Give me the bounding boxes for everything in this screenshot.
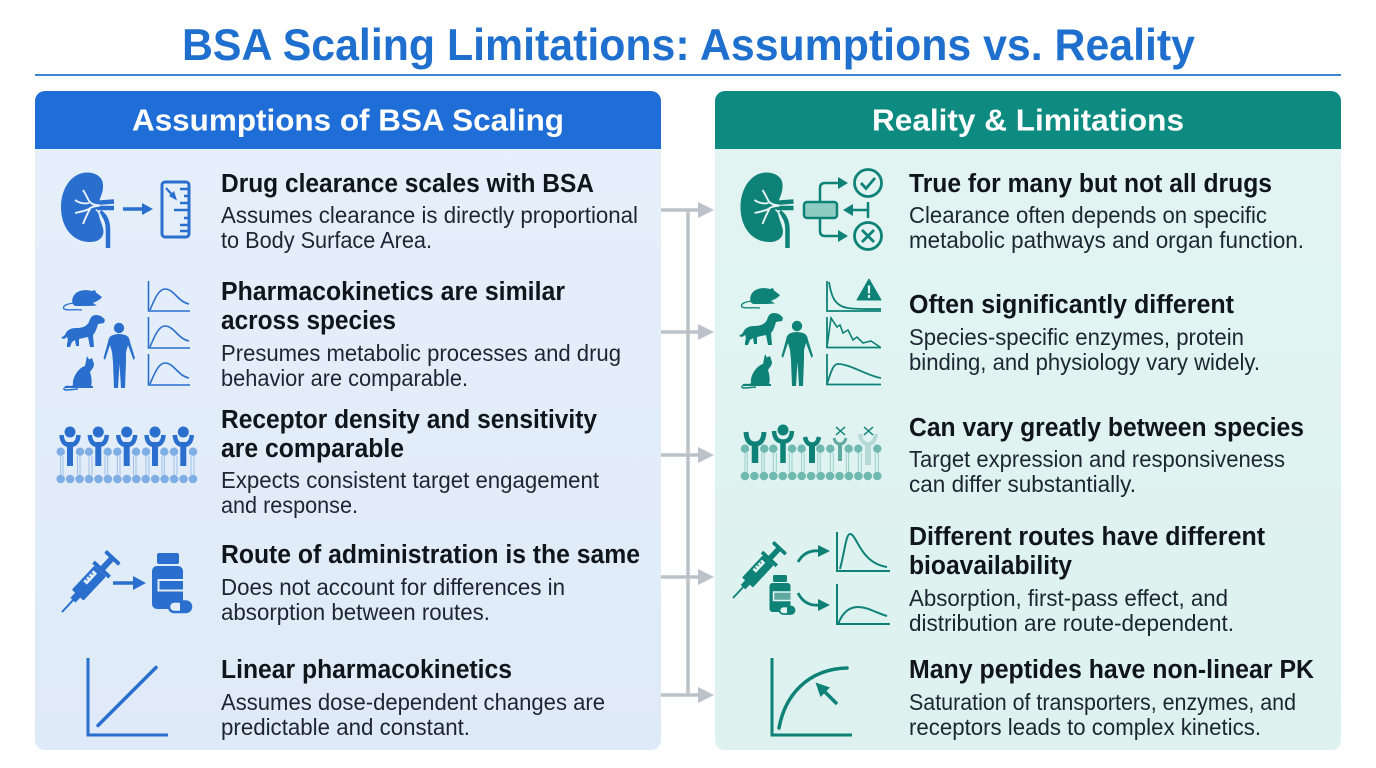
icon: species with divergent curves and warning: [739, 279, 881, 388]
text: often different: Species-specific enzymes, protein: [909, 324, 1244, 350]
text: linear pharmacokinetics: predictable and constant.: [221, 714, 470, 740]
icon: linear chart: [88, 658, 168, 735]
text: receptor density: Expects consistent target engagement: [221, 467, 599, 493]
row: receptor assumption: [56, 406, 599, 518]
icon: species and PK curves: [61, 281, 190, 390]
heading: assumptions: Assumptions of BSA Scaling: [132, 102, 564, 138]
row: route assumption: [54, 541, 640, 625]
text: many peptides: Many peptides have non-linear PK: [909, 656, 1315, 684]
text: route of administration: absorption between routes.: [221, 599, 490, 625]
text: many peptides: Saturation of transporters, enzymes, and: [909, 689, 1296, 715]
text: pharmacokinetics: across species: [221, 307, 396, 335]
panel: assumptions of BSA scaling: [35, 91, 661, 750]
text: route of administration: [221, 541, 640, 625]
icon: syringe to medicine bottle: [54, 549, 191, 620]
text: can vary greatly: [909, 414, 1304, 497]
text: different routes: bioavailability: [909, 552, 1073, 580]
row: clearance reality: [740, 170, 1304, 253]
text: true for many: metabolic pathways and organ function.: [909, 227, 1304, 253]
text: different routes: Different routes have different: [909, 523, 1265, 551]
text: drug clearance: to Body Surface Area.: [221, 227, 432, 253]
text: pharmacokinetics: [221, 278, 621, 391]
text: pharmacokinetics: Presumes metabolic processes and drug: [221, 340, 621, 366]
text: often different: [909, 291, 1260, 375]
text: pharmacokinetics: Pharmacokinetics are similar: [221, 278, 565, 306]
row: pharmacokinetics assumption: [61, 278, 621, 391]
text: can vary greatly: Target expression and responsiveness: [909, 446, 1285, 472]
row: non-linear PK reality: [772, 656, 1315, 740]
row: receptor reality: [741, 414, 1304, 497]
icon: kidney to ruler: [61, 172, 189, 248]
row: linear PK assumption: [88, 656, 605, 740]
text: route of administration: Does not account for differences in: [221, 574, 565, 600]
title: BSA Scaling Limitations: Assumptions vs. Reality: [182, 21, 1195, 70]
icon: varied receptors on membrane: [741, 424, 882, 480]
icon: kidney with pathway outcomes: [740, 170, 882, 250]
text: different routes: [909, 523, 1265, 636]
arrows: connecting assumptions to reality: [661, 202, 714, 703]
text: can vary greatly: Can vary greatly between species: [909, 414, 1304, 442]
text: true for many: True for many but not all drugs: [909, 170, 1272, 198]
text: true for many: [909, 170, 1304, 253]
text: route of administration: Route of administration is the same: [221, 541, 640, 569]
heading: reality: Reality & Limitations: [872, 102, 1184, 138]
icon: saturating curve chart: [772, 658, 852, 735]
icon: syringe and bottle with bioavailability curves: [726, 532, 890, 624]
text: linear pharmacokinetics: Assumes dose-dependent changes are: [221, 689, 605, 715]
text: drug clearance: Drug clearance scales with BSA: [221, 170, 594, 198]
text: receptor density: and response.: [221, 492, 358, 518]
text: receptor density: [221, 406, 599, 518]
text: many peptides: receptors leads to complex kinetics.: [909, 714, 1261, 740]
text: linear pharmacokinetics: [221, 656, 605, 740]
text: pharmacokinetics: behavior are comparable.: [221, 365, 468, 391]
heading: reality: [715, 91, 1341, 149]
text: different routes: Absorption, first-pass effect, and: [909, 585, 1228, 611]
text: often different: Often significantly different: [909, 291, 1234, 319]
text: different routes: distribution are route-dependent.: [909, 610, 1234, 636]
icon: receptors on membrane: [56, 426, 197, 483]
text: receptor density: are comparable: [221, 435, 404, 463]
text: often different: binding, and physiology vary widely.: [909, 349, 1260, 375]
panel: reality and limitations: [715, 91, 1341, 750]
text: receptor density: Receptor density and sensitivity: [221, 406, 598, 434]
text: true for many: Clearance often depends on specific: [909, 202, 1267, 228]
text: linear pharmacokinetics: Linear pharmacokinetics: [221, 656, 512, 684]
row: route reality: [726, 523, 1265, 636]
text: can vary greatly: can differ substantially.: [909, 471, 1136, 497]
text: drug clearance: Assumes clearance is directly proportional: [221, 202, 638, 228]
row: pharmacokinetics reality: [739, 279, 1260, 388]
text: drug clearance: [221, 170, 638, 253]
text: many peptides: [909, 656, 1315, 740]
heading: assumptions: [35, 91, 661, 149]
row: drug clearance assumption: [61, 170, 638, 253]
